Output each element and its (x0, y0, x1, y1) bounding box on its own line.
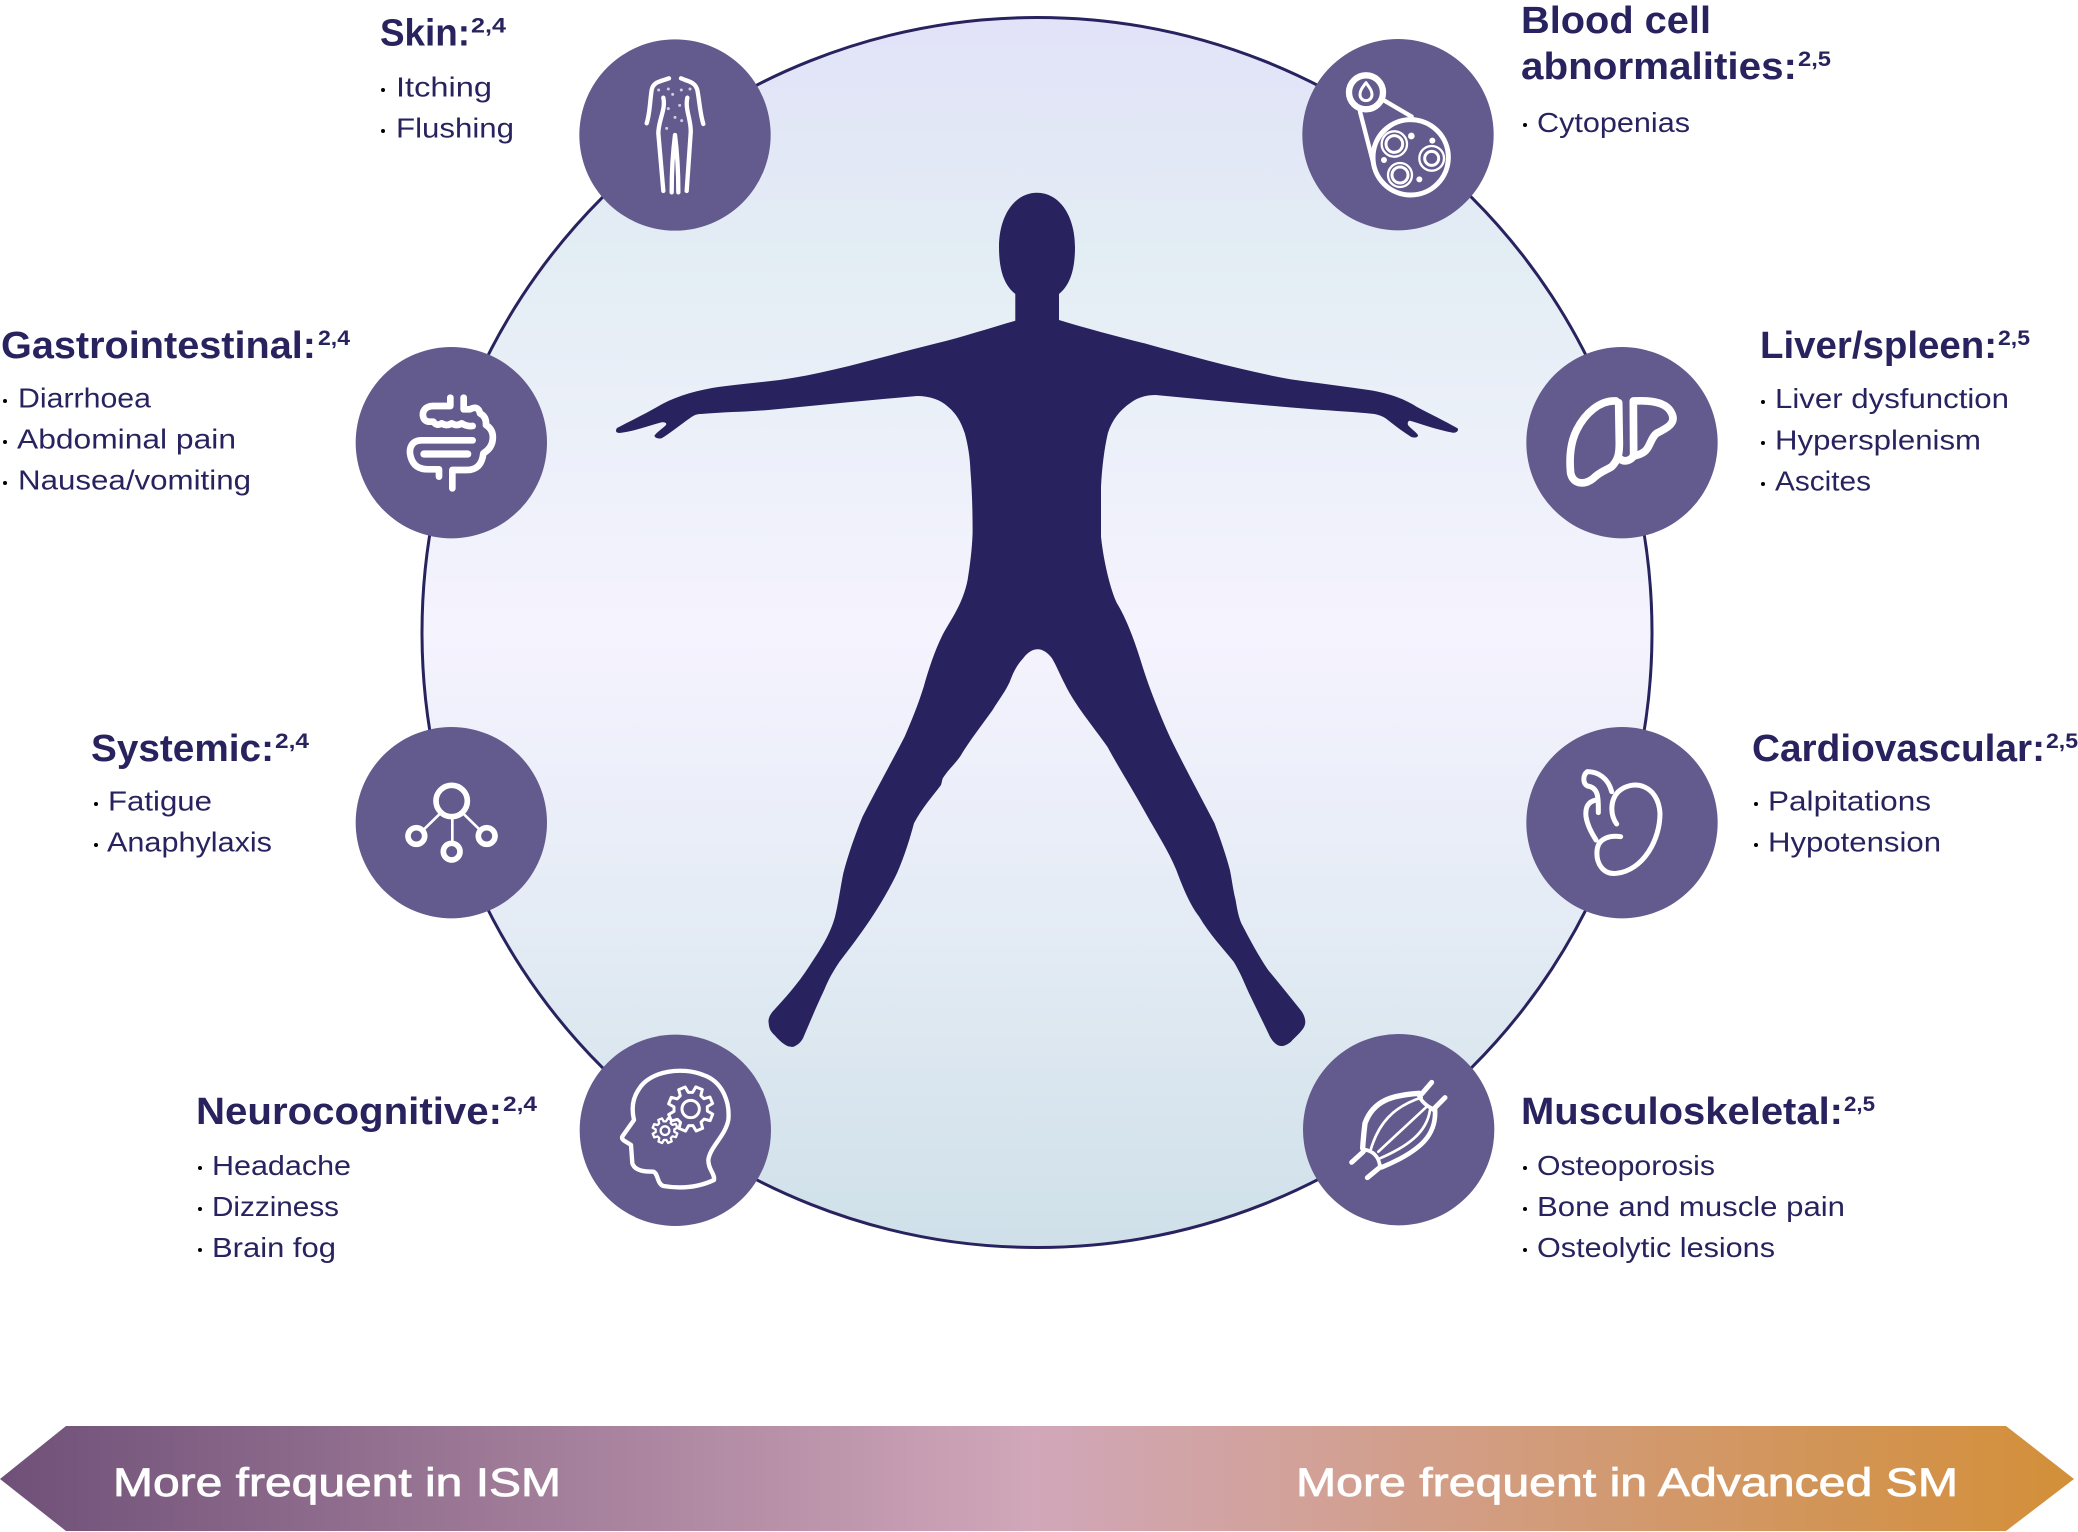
label: musculoskeletal: Osteolytic lesions (1537, 1232, 1775, 1263)
label: gastrointestinal: Nausea/vomiting (18, 464, 251, 496)
label: blood cell abnormalities (1521, 0, 1831, 138)
frequency arrow: More frequent in Advanced SM (1296, 1461, 1958, 1505)
icon: skin (579, 39, 771, 231)
label: liver and spleen: Hypersplenism (1775, 424, 1981, 456)
label: neurocognitive: Dizziness (212, 1191, 339, 1222)
label: systemic: Systemic: (91, 728, 274, 770)
label: musculoskeletal: Osteoporosis (1537, 1150, 1715, 1181)
frequency arrow: More frequent in ISM (113, 1461, 561, 1505)
frequency arrow (0, 1426, 2074, 1531)
label: systemic: 2,4 (275, 730, 309, 753)
label: neurocognitive: 2,4 (503, 1093, 537, 1116)
label: skin: Skin: (380, 12, 470, 54)
label: skin (380, 12, 514, 144)
label: musculoskeletal: 2,5 (1844, 1093, 1875, 1116)
icon: heart (1526, 727, 1718, 918)
label: neurocognitive: Headache (212, 1150, 351, 1181)
label: gastrointestinal: Diarrhoea (18, 382, 152, 414)
icon: neurocognitive (580, 1035, 771, 1226)
central gradient circle (422, 18, 1652, 1248)
label: skin: Flushing (396, 112, 514, 144)
label: systemic: Anaphylaxis (107, 826, 272, 858)
label: blood cell abnormalities: 2,5 (1798, 48, 1831, 71)
label: skin: 2,4 (471, 14, 506, 38)
label: gastrointestinal: Abdominal pain (17, 424, 236, 454)
label: gastrointestinal (1, 325, 350, 496)
label: cardiovascular (1752, 728, 2078, 858)
label: neurocognitive (196, 1091, 537, 1263)
label: liver and spleen: Ascites (1775, 466, 1871, 496)
label: blood cell abnormalities: abnormalities: (1521, 46, 1797, 88)
label: liver and spleen (1760, 325, 2030, 496)
icon: gastrointestinal (356, 347, 547, 538)
label: liver and spleen: 2,5 (1998, 327, 2030, 350)
label: blood cell abnormalities: Cytopenias (1537, 107, 1690, 138)
label: systemic: Fatigue (108, 786, 212, 816)
icon: blood cells (1302, 39, 1494, 230)
label: systemic (91, 728, 309, 858)
label: liver and spleen: Liver dysfunction (1775, 383, 2009, 414)
label: gastrointestinal: Gastrointestinal: (1, 325, 316, 367)
label: neurocognitive: Neurocognitive: (196, 1091, 502, 1133)
label: liver and spleen: Liver/spleen: (1760, 325, 1997, 367)
label: musculoskeletal: Musculoskeletal: (1521, 1091, 1843, 1133)
label: skin: Itching (396, 72, 492, 102)
label: cardiovascular: Palpitations (1768, 786, 1931, 816)
icon: musculoskeletal (1303, 1034, 1494, 1225)
label: cardiovascular: 2,5 (2046, 730, 2078, 753)
label: gastrointestinal: 2,4 (318, 327, 350, 350)
label: neurocognitive: Brain fog (212, 1232, 336, 1263)
label: musculoskeletal: Bone and muscle pain (1537, 1191, 1845, 1222)
icon: systemic (356, 727, 547, 918)
human silhouette (616, 193, 1458, 1047)
label: musculoskeletal (1521, 1091, 1875, 1263)
label: blood cell abnormalities: Blood cell (1521, 0, 1711, 42)
icon: liver and spleen (1526, 347, 1718, 538)
label: cardiovascular: Hypotension (1768, 826, 1941, 858)
label: cardiovascular: Cardiovascular: (1752, 728, 2045, 770)
